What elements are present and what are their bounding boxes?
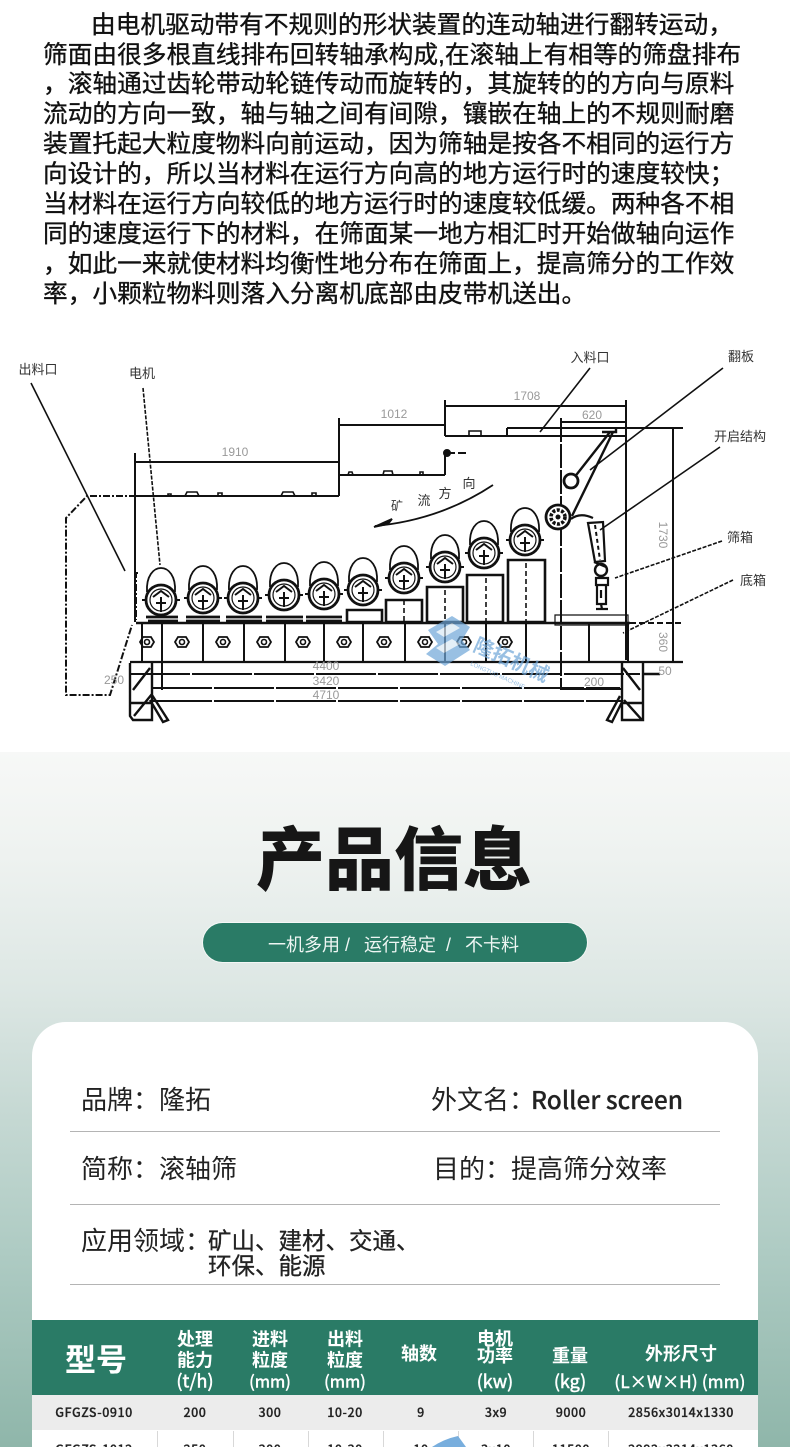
row 1 values: 2856x3014x1330: [628, 1402, 734, 1421]
dimension numbers: 4400: [313, 659, 340, 673]
intro text block: 由电机驱动带有不规则的形状装置的连动轴进行翻转运动，: [91, 12, 733, 39]
application field: [81, 1226, 420, 1279]
part labels: 流: [417, 493, 431, 508]
short name field: 简称：滚轴筛: [81, 1154, 237, 1184]
intro text block: 筛面由很多根直线排布回转轴承构成,在滚轴上有相等的筛盘排布: [43, 42, 741, 69]
intro text block: 当材料在运行方向较低的地方运行时的速度较低缓。两种各不相: [43, 191, 734, 218]
application field: 环保、能源: [208, 1253, 326, 1279]
left support truss: [130, 663, 168, 722]
header: model: 型号: [65, 1335, 127, 1380]
title: 产品信息: [256, 822, 532, 899]
header: shafts: 轴数: [401, 1340, 437, 1366]
header: discharge size: [324, 1326, 366, 1392]
part labels: 出料口: [18, 362, 58, 377]
subtitle pill: 不卡料: [465, 935, 519, 955]
table header: [32, 1320, 758, 1395]
dimension numbers: 1730: [656, 522, 670, 549]
text: Roller screen: [531, 1082, 683, 1117]
part labels: 方: [438, 486, 452, 501]
right support truss: [607, 663, 660, 722]
part labels: 开启结构: [714, 429, 766, 444]
header: motor power: [477, 1325, 513, 1368]
divider: [70, 1131, 720, 1132]
watermark logo: LONGTUO MACHINE: [469, 661, 526, 691]
header: feed size: [249, 1326, 291, 1392]
row 1 values: 300: [259, 1402, 281, 1421]
subtitle pill: 一机多用 /: [268, 935, 350, 955]
header: feed size: (mm): [249, 1368, 291, 1392]
foreign name field: 外文名：: [431, 1085, 535, 1115]
header: dimensions unit: (L×W×H) (mm): [614, 1368, 746, 1393]
part labels: 底箱: [740, 573, 766, 588]
row 2 watermark fragment: [432, 1436, 466, 1447]
row 1 values: [55, 1402, 734, 1421]
header: motor power: 电机: [477, 1325, 513, 1351]
dimension numbers: 200: [584, 675, 604, 689]
dimension numbers: 1012: [381, 407, 408, 421]
part labels: 翻板: [728, 349, 754, 364]
row 1 values: 200: [184, 1402, 206, 1421]
intro text block: 同的速度运行下的材料，在筛面某一地方相汇时开始做轴向运作: [43, 221, 734, 248]
row 1 values: GFGZS-0910: [55, 1402, 133, 1421]
panel: product information card: [32, 1022, 758, 1447]
watermark logo: [426, 616, 552, 691]
intro text block: ，如此一来就使材料均衡性地分布在筛面上，提高筛分的工作效: [43, 251, 734, 278]
frame and dimension lines: [130, 400, 683, 701]
header: discharge size: 出料: [327, 1326, 363, 1352]
dimension numbers: 250: [104, 673, 124, 687]
header: dimensions: 外形尺寸: [645, 1340, 717, 1366]
foreign name field: [431, 1082, 683, 1117]
part labels: 矿: [391, 499, 403, 513]
purpose field: 目的：提高筛分效率: [433, 1154, 667, 1184]
subtitle pill: 运行稳定: [364, 935, 436, 955]
dimension numbers: 1708: [514, 389, 541, 403]
header: capacity: (t/h): [176, 1368, 214, 1394]
roller motors: [142, 508, 545, 622]
header: motor unit: (kw): [477, 1368, 513, 1394]
part labels: 入料口: [570, 350, 610, 365]
table row 1: [32, 1395, 758, 1430]
dimension numbers: [104, 389, 672, 702]
subtitle pill: [203, 923, 587, 962]
dimension numbers: 360: [656, 632, 670, 652]
dash-dot outline on the left: [66, 496, 138, 695]
dimension numbers: 1910: [222, 445, 249, 459]
application field: 应用领域：: [81, 1226, 211, 1256]
flip plate mechanism: [546, 427, 616, 609]
box bearing icons: [140, 637, 512, 647]
brand field: 品牌：隆拓: [81, 1085, 211, 1115]
ore flow arrow: [374, 485, 493, 527]
application field: 矿山、建材、交通、: [208, 1228, 420, 1254]
intro text block: 装置托起大粒度物料向前运动，因为筛轴是按各不相同的运行方: [43, 131, 734, 158]
header: feed size: 粒度: [252, 1346, 288, 1372]
header: discharge size: 粒度: [327, 1346, 363, 1372]
dimension numbers: 4710: [313, 688, 340, 702]
row 1 values: 10-20: [327, 1402, 363, 1421]
structure diagram of roller screen: [18, 349, 766, 724]
header: capacity: [176, 1326, 214, 1394]
header: capacity: 处理: [177, 1326, 213, 1352]
divider: [70, 1284, 720, 1285]
header: weight unit: (kg): [554, 1368, 586, 1394]
part labels: 向: [462, 476, 476, 491]
intro text block: 流动的方向一致，轴与轴之间有间隙，镶嵌在轴上的不规则耐磨: [43, 101, 734, 128]
header: discharge size: (mm): [324, 1368, 366, 1392]
part labels: 电机: [129, 366, 155, 381]
dimension numbers: 50: [658, 664, 672, 678]
header: motor power: 功率: [477, 1342, 513, 1368]
header: capacity: 能力: [177, 1346, 213, 1372]
gradient background: [0, 752, 790, 1447]
row 1 values: 3x9: [485, 1402, 507, 1421]
header: feed size: 进料: [252, 1326, 288, 1352]
header: weight: 重量: [552, 1342, 588, 1368]
divider: [70, 1204, 720, 1205]
intro text block: ，滚轴通过齿轮带动轮链传动而旋转的，其旋转的的方向与原料: [43, 71, 734, 98]
intro text block: [43, 12, 741, 308]
watermark logo: 隆拓机械: [470, 634, 552, 687]
subtitle pill: /: [446, 935, 451, 955]
part labels: [18, 349, 766, 588]
row 1 values: 9000: [556, 1402, 586, 1421]
part labels: 筛箱: [727, 530, 753, 545]
row 1 values: 9: [417, 1402, 425, 1421]
row 2 values: [55, 1439, 734, 1447]
intro text block: 率，小颗粒物料则落入分离机底部由皮带机送出。: [43, 281, 586, 308]
dimension numbers: 3420: [313, 674, 340, 688]
dimension numbers: 620: [582, 408, 602, 422]
intro text block: 向设计的，所以当材料在运行方向高的地方运行时的速度较快；: [43, 161, 734, 188]
leader lines: [31, 368, 733, 633]
